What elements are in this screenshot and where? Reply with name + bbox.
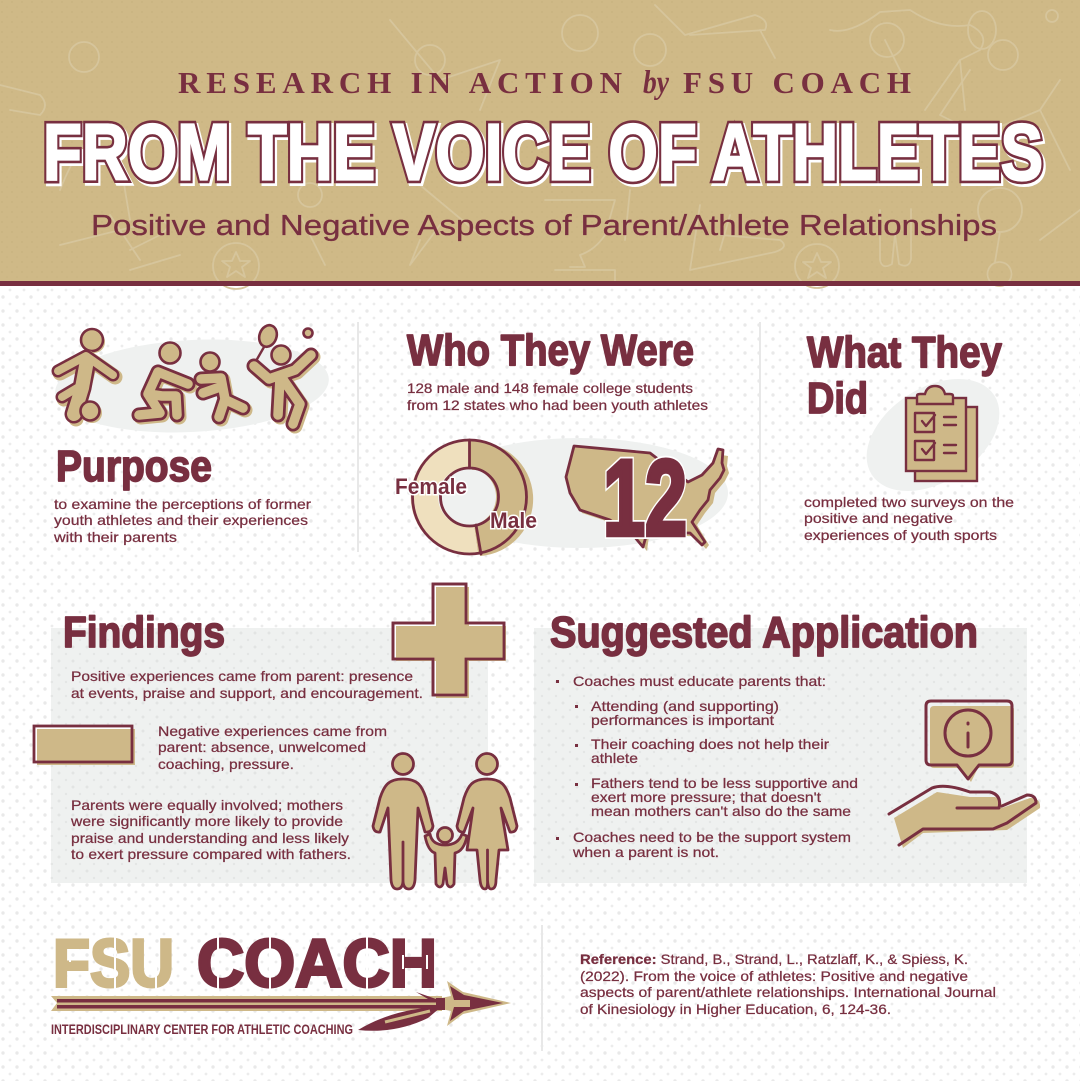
icon: info bubble over hand bbox=[889, 701, 1040, 848]
text: positive experiences bbox=[71, 668, 423, 701]
heading: purpose: Purpose bbox=[56, 442, 212, 491]
list: application bullets bbox=[556, 673, 858, 860]
text: parental involvement: were significantly more likely to provide bbox=[70, 813, 343, 829]
logo wordmark: FSU bbox=[53, 926, 174, 1002]
text: parental involvement bbox=[70, 797, 351, 862]
list: application bullets: Their coaching does not help their bbox=[591, 736, 829, 752]
logo wordmark: COACH bbox=[197, 926, 437, 1002]
icon: clipboard checklist bbox=[906, 386, 977, 481]
logo wordmark bbox=[53, 926, 437, 1002]
subtitle: Positive and Negative Aspects of Parent/Athlete Relationships bbox=[91, 210, 997, 242]
panel: findings bbox=[34, 584, 517, 889]
panel: suggested application bbox=[534, 608, 1040, 883]
label: male: Male bbox=[490, 508, 537, 533]
panel: what they did bbox=[804, 328, 1020, 543]
map: United States with 12 states bbox=[566, 437, 729, 558]
list: application bullets: when a parent is not. bbox=[572, 844, 719, 860]
logo: FSU Coach bbox=[51, 926, 511, 1037]
text: purpose body bbox=[53, 496, 311, 545]
text: negative experiences: coaching, pressure. bbox=[158, 756, 294, 772]
number: 12 states: 12 bbox=[603, 437, 687, 558]
list: application bullets: Attending (and supporting) bbox=[591, 698, 779, 714]
list: application bullets: exert more pressure; that doesn't bbox=[591, 789, 821, 805]
text: what they did body: completed two surveys on the bbox=[804, 494, 1014, 510]
eyebrow heading: FSU COACH bbox=[683, 65, 911, 100]
heading: what they did: Did bbox=[807, 374, 868, 423]
text: purpose body: youth athletes and their experiences bbox=[54, 512, 308, 528]
text: reference: Reference: Strand, B., Strand, L., Ratzlaff, K., & Spiess, K. bbox=[580, 951, 968, 967]
text: parental involvement: praise and understanding and less likely bbox=[71, 830, 349, 846]
icon: soccer player bbox=[58, 329, 115, 423]
icon: minus sign bbox=[34, 726, 135, 765]
donut chart bbox=[395, 440, 537, 556]
eyebrow heading bbox=[178, 65, 911, 101]
list: application bullets: Fathers tend to be less supportive and bbox=[591, 775, 858, 791]
eyebrow heading: RESEARCH IN ACTION bbox=[178, 65, 622, 100]
text: purpose body: with their parents bbox=[53, 529, 177, 545]
text: what they did body: experiences of youth sports bbox=[804, 527, 997, 543]
text: what they did body bbox=[804, 494, 1014, 543]
label: female: Female bbox=[395, 474, 467, 499]
text: what they did body: positive and negative bbox=[804, 510, 953, 526]
text: participants bbox=[407, 380, 708, 413]
text: negative experiences: Negative experiences came from bbox=[158, 723, 387, 739]
text: reference: of Kinesiology in Higher Education, 6, 124-36. bbox=[580, 1001, 891, 1017]
list: application bullets: mean mothers can't also do the same bbox=[591, 803, 851, 819]
text: negative experiences: parent: absence, unwelcomed bbox=[158, 739, 366, 755]
list: application bullets: Coaches need to be the support system bbox=[573, 829, 851, 845]
header banner bbox=[0, 0, 1080, 289]
heading: what they did bbox=[807, 328, 1002, 423]
heading: findings: Findings bbox=[63, 608, 225, 657]
section dividers bbox=[357, 322, 761, 1051]
text: negative experiences bbox=[158, 723, 387, 772]
text: parental involvement: Parents were equally involved; mothers bbox=[71, 797, 343, 813]
icon: crouching parent bbox=[139, 342, 190, 417]
panel: who they were bbox=[395, 326, 729, 558]
number: 12 states bbox=[603, 437, 687, 558]
icon: running child bbox=[200, 352, 245, 419]
icon: plus sign bbox=[393, 584, 506, 698]
icon: tennis player bbox=[254, 323, 313, 426]
text: parental involvement: to exert pressure compared with fathers. bbox=[71, 846, 351, 862]
text: participants: from 12 states who had been youth athletes bbox=[407, 397, 708, 413]
heading: what they did: What They bbox=[807, 328, 1002, 377]
number: 12 states: 12 bbox=[603, 437, 687, 558]
list: application bullets: athlete bbox=[591, 750, 638, 766]
text: positive experiences: Positive experiences came from parent: presence bbox=[71, 668, 413, 684]
text: reference: (2022). From the voice of athletes: Positive and negative bbox=[580, 968, 968, 984]
text: reference bbox=[580, 951, 996, 1017]
logo arrow bbox=[51, 981, 511, 1031]
header rule bbox=[0, 281, 1080, 286]
text: reference: aspects of parent/athlete relationships. International Journal bbox=[580, 984, 996, 1000]
list: application bullets: Coaches must educate parents that: bbox=[573, 673, 826, 689]
list: application bullets: performances is important bbox=[591, 712, 774, 728]
heading: who they were: Who They Were bbox=[407, 326, 694, 375]
heading: suggested application: Suggested Application bbox=[550, 608, 978, 657]
logo tagline: INTERDISCIPLINARY CENTER FOR ATHLETIC COACHING bbox=[51, 1022, 353, 1037]
icon: family bbox=[373, 754, 517, 889]
text: purpose body: to examine the perceptions of former bbox=[54, 496, 311, 512]
eyebrow heading: by bbox=[643, 65, 669, 101]
text: positive experiences: at events, praise and support, and encouragement. bbox=[71, 685, 423, 701]
text: participants: 128 male and 148 female college students bbox=[407, 380, 693, 396]
panel: purpose bbox=[53, 323, 331, 545]
